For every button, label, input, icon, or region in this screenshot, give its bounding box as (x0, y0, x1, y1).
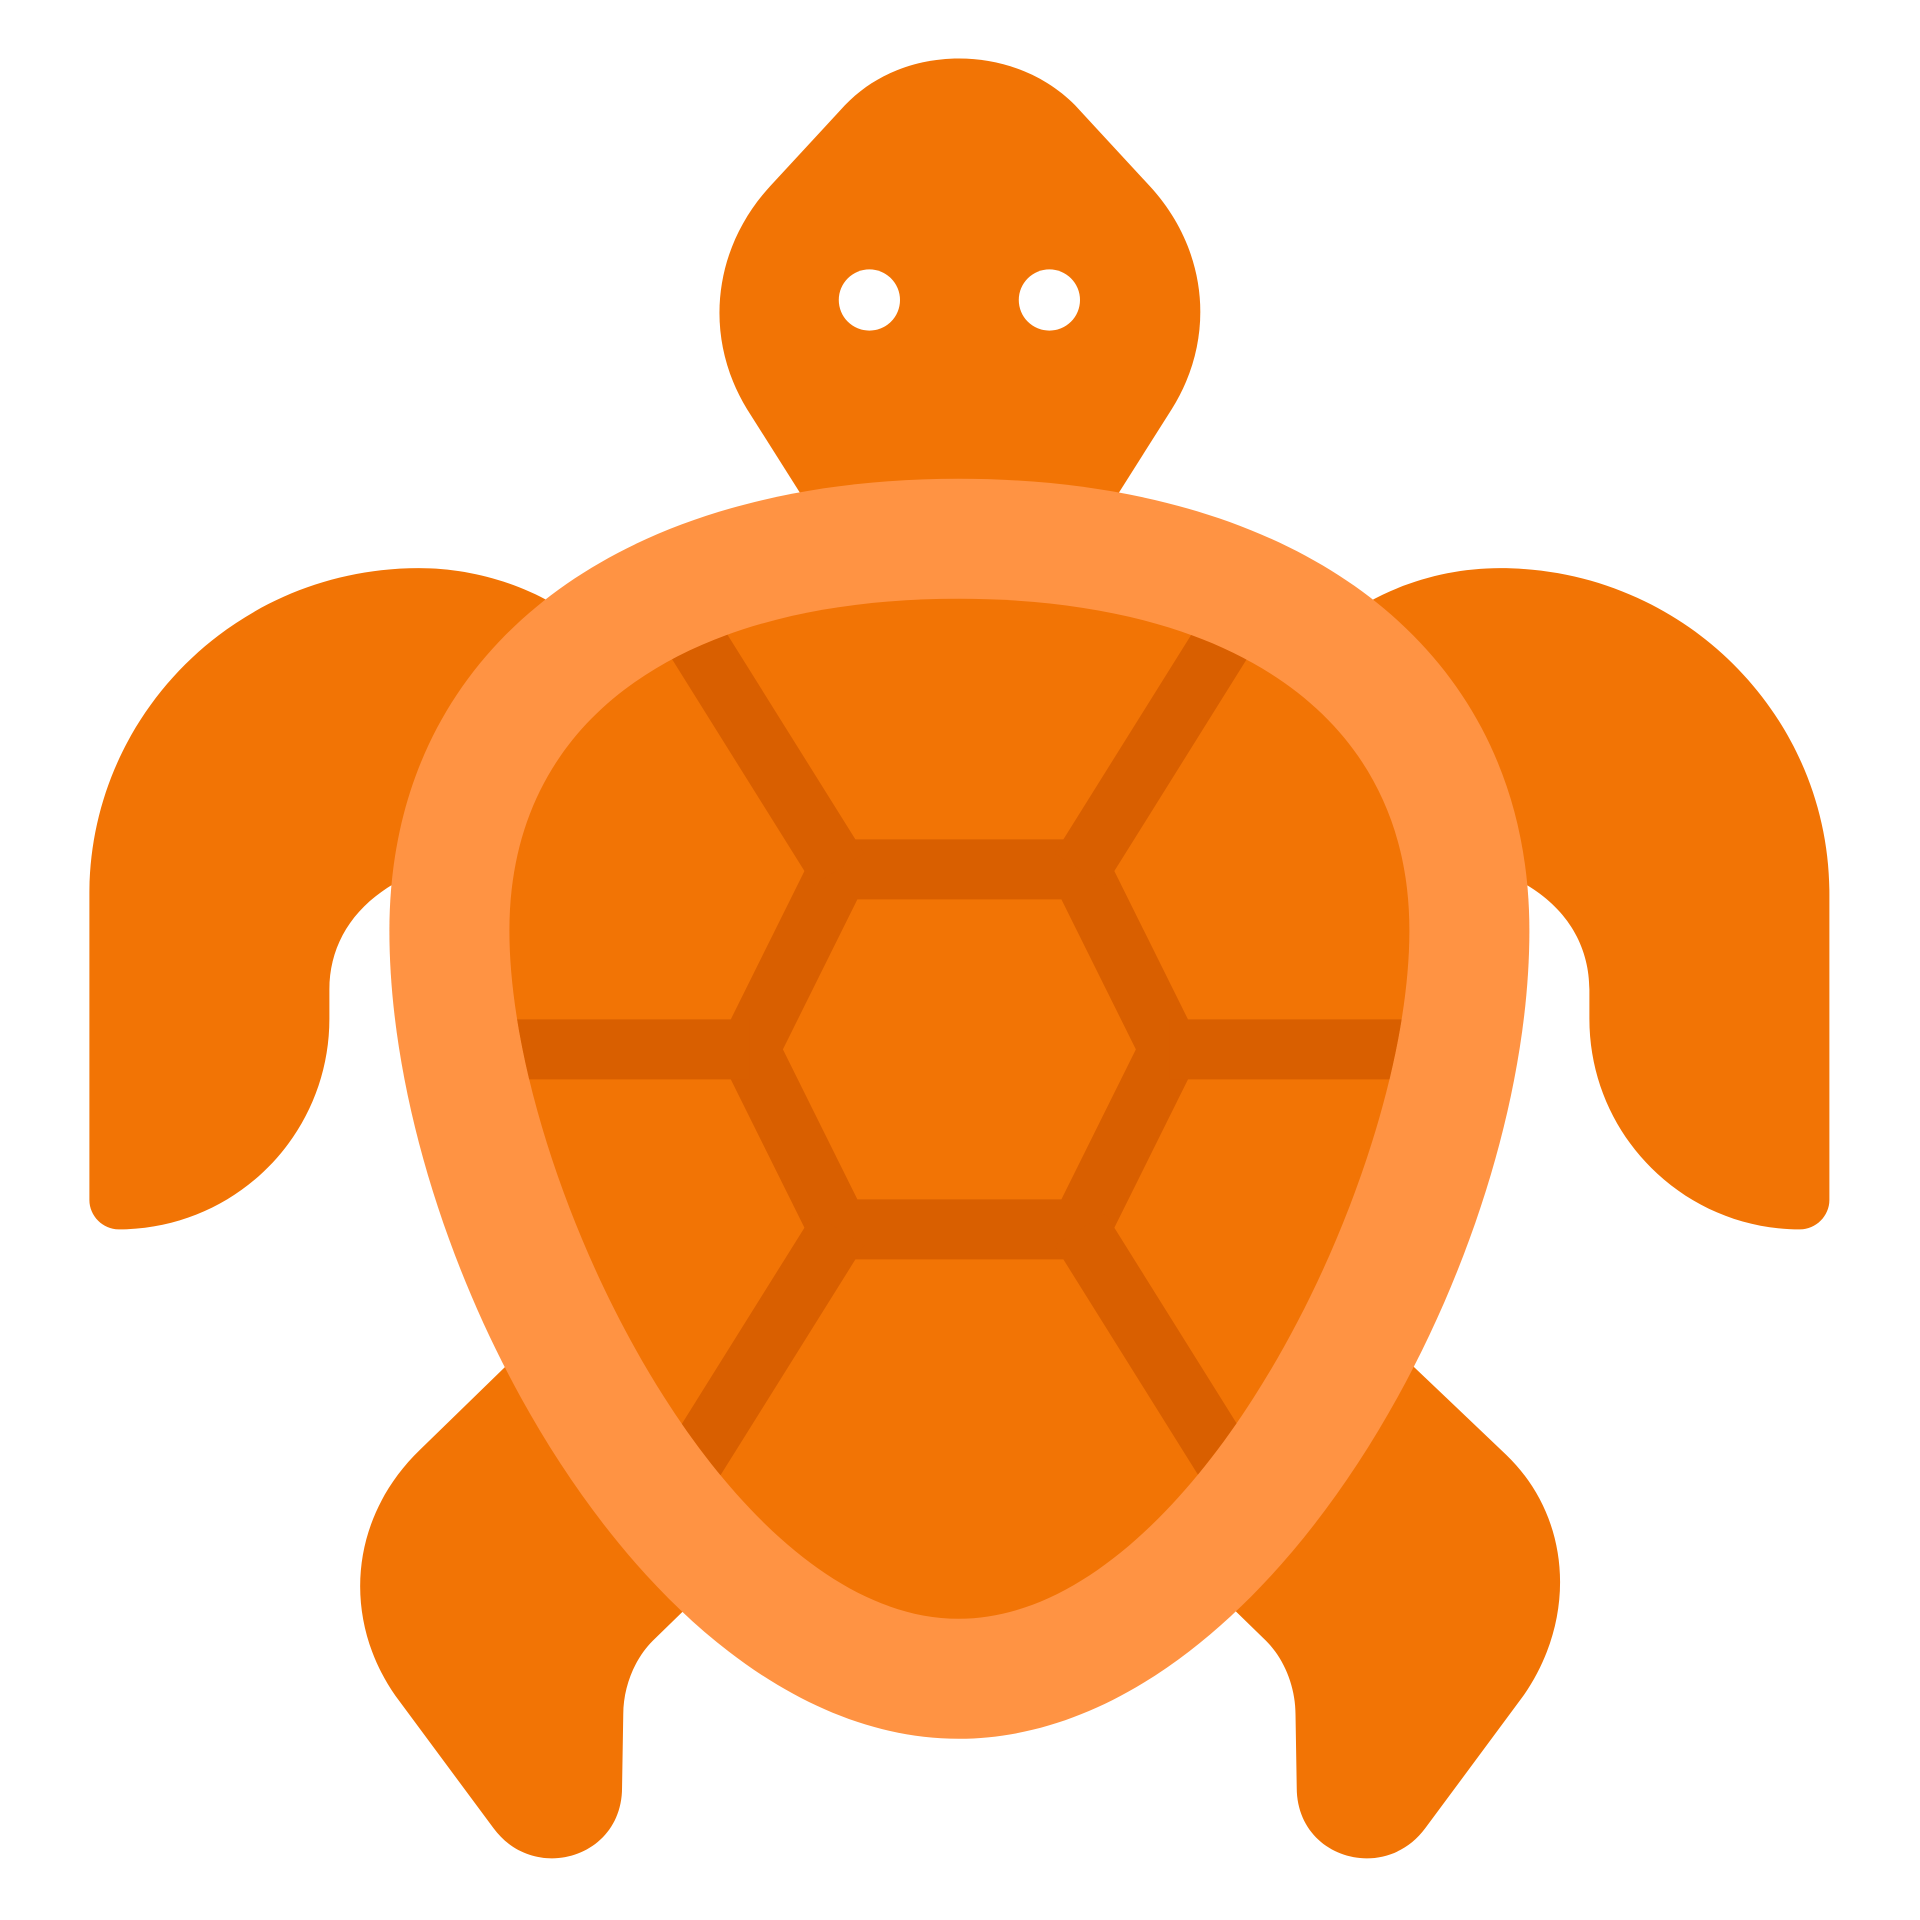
icon: right rear flipper (1221, 1358, 1560, 1858)
shell hexagon pattern (478, 634, 1441, 1464)
icon: right eye (1019, 269, 1080, 331)
shell centre (509, 599, 1409, 1619)
icon: left front flipper (89, 568, 551, 1229)
icon: left eye (839, 269, 900, 331)
shell rim (389, 479, 1529, 1739)
icon: right front flipper (1368, 568, 1829, 1229)
panel: shell (389, 479, 1529, 1739)
icon: left rear flipper (360, 1358, 698, 1858)
icon: head (719, 58, 1200, 506)
